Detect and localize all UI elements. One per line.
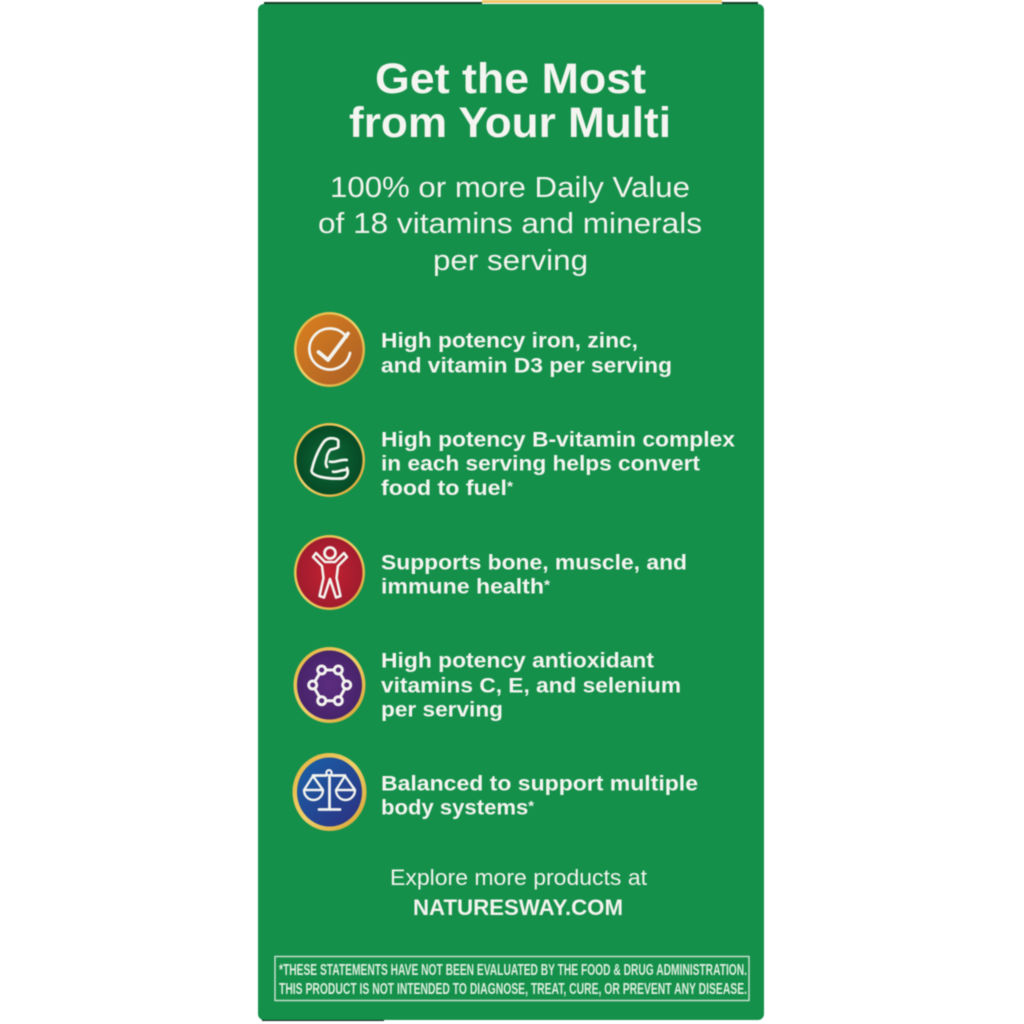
text: bone, muscle, immune: * bbox=[544, 576, 551, 592]
text: antioxidants: High potency antioxidant bbox=[381, 650, 654, 672]
icon: check mark badge bbox=[294, 312, 365, 387]
text: antioxidants: vitamins C, E, and selenium bbox=[381, 674, 681, 698]
FDA disclaimer box: THIS PRODUCT IS NOT INTENDED TO DIAGNOSE, TREAT, CURE, OR PREVENT ANY DISEASE. bbox=[279, 981, 747, 998]
text: iron, zinc, D3: High potency iron, zinc, bbox=[381, 330, 638, 352]
text: iron, zinc, D3: and vitamin D3 per serving bbox=[381, 354, 672, 378]
benefit: antioxidants bbox=[294, 647, 681, 723]
website call to action: NATURESWAY.COM bbox=[413, 895, 623, 920]
text: antioxidants: per serving bbox=[381, 698, 503, 722]
title: Get the Most bbox=[375, 55, 646, 103]
benefit: B-vitamin complex bbox=[294, 423, 735, 500]
FDA disclaimer box bbox=[275, 956, 749, 1000]
subtitle: of 18 vitamins and minerals bbox=[318, 208, 702, 240]
icon: flexed arm badge bbox=[294, 423, 365, 497]
text: balanced: * bbox=[528, 798, 535, 814]
benefit: iron, zinc, D3 bbox=[294, 312, 672, 387]
icon: balance scale badge bbox=[292, 753, 366, 831]
text: balanced: body systems bbox=[381, 796, 521, 820]
icon: molecule ring badge bbox=[294, 647, 366, 723]
text: antioxidants bbox=[381, 650, 681, 722]
website call to action bbox=[390, 865, 647, 920]
FDA disclaimer box: *THESE STATEMENTS HAVE NOT BEEN EVALUATED BY THE FOOD & DRUG ADMINISTRATION. bbox=[279, 962, 747, 979]
subtitle bbox=[318, 172, 702, 277]
icon: active person badge bbox=[294, 535, 365, 610]
box bottom edge bbox=[262, 1018, 384, 1021]
box top edge bbox=[264, 0, 758, 5]
benefit: bone, muscle, immune bbox=[294, 535, 687, 610]
benefit: balanced bbox=[292, 753, 698, 831]
website call to action: Explore more products at bbox=[390, 865, 647, 890]
text: B-vitamin complex: food to fuel bbox=[381, 477, 495, 500]
title bbox=[349, 55, 671, 147]
text: bone, muscle, immune bbox=[381, 552, 687, 598]
text: B-vitamin complex: in each serving helps convert bbox=[381, 452, 700, 476]
text: balanced bbox=[381, 772, 698, 820]
text: balanced: Balanced to support multiple bbox=[381, 772, 698, 796]
title: from Your Multi bbox=[349, 99, 671, 147]
text: bone, muscle, immune: immune health bbox=[381, 576, 529, 598]
subtitle: per serving bbox=[433, 245, 588, 277]
text: B-vitamin complex bbox=[381, 428, 735, 500]
text: B-vitamin complex: High potency B-vitamin complex bbox=[381, 428, 735, 452]
subtitle: 100% or more Daily Value bbox=[330, 172, 690, 204]
text: iron, zinc, D3 bbox=[381, 330, 672, 378]
green panel bbox=[258, 4, 764, 1020]
text: bone, muscle, immune: Supports bone, muscle, and bbox=[381, 552, 687, 574]
text: B-vitamin complex: * bbox=[507, 478, 514, 494]
